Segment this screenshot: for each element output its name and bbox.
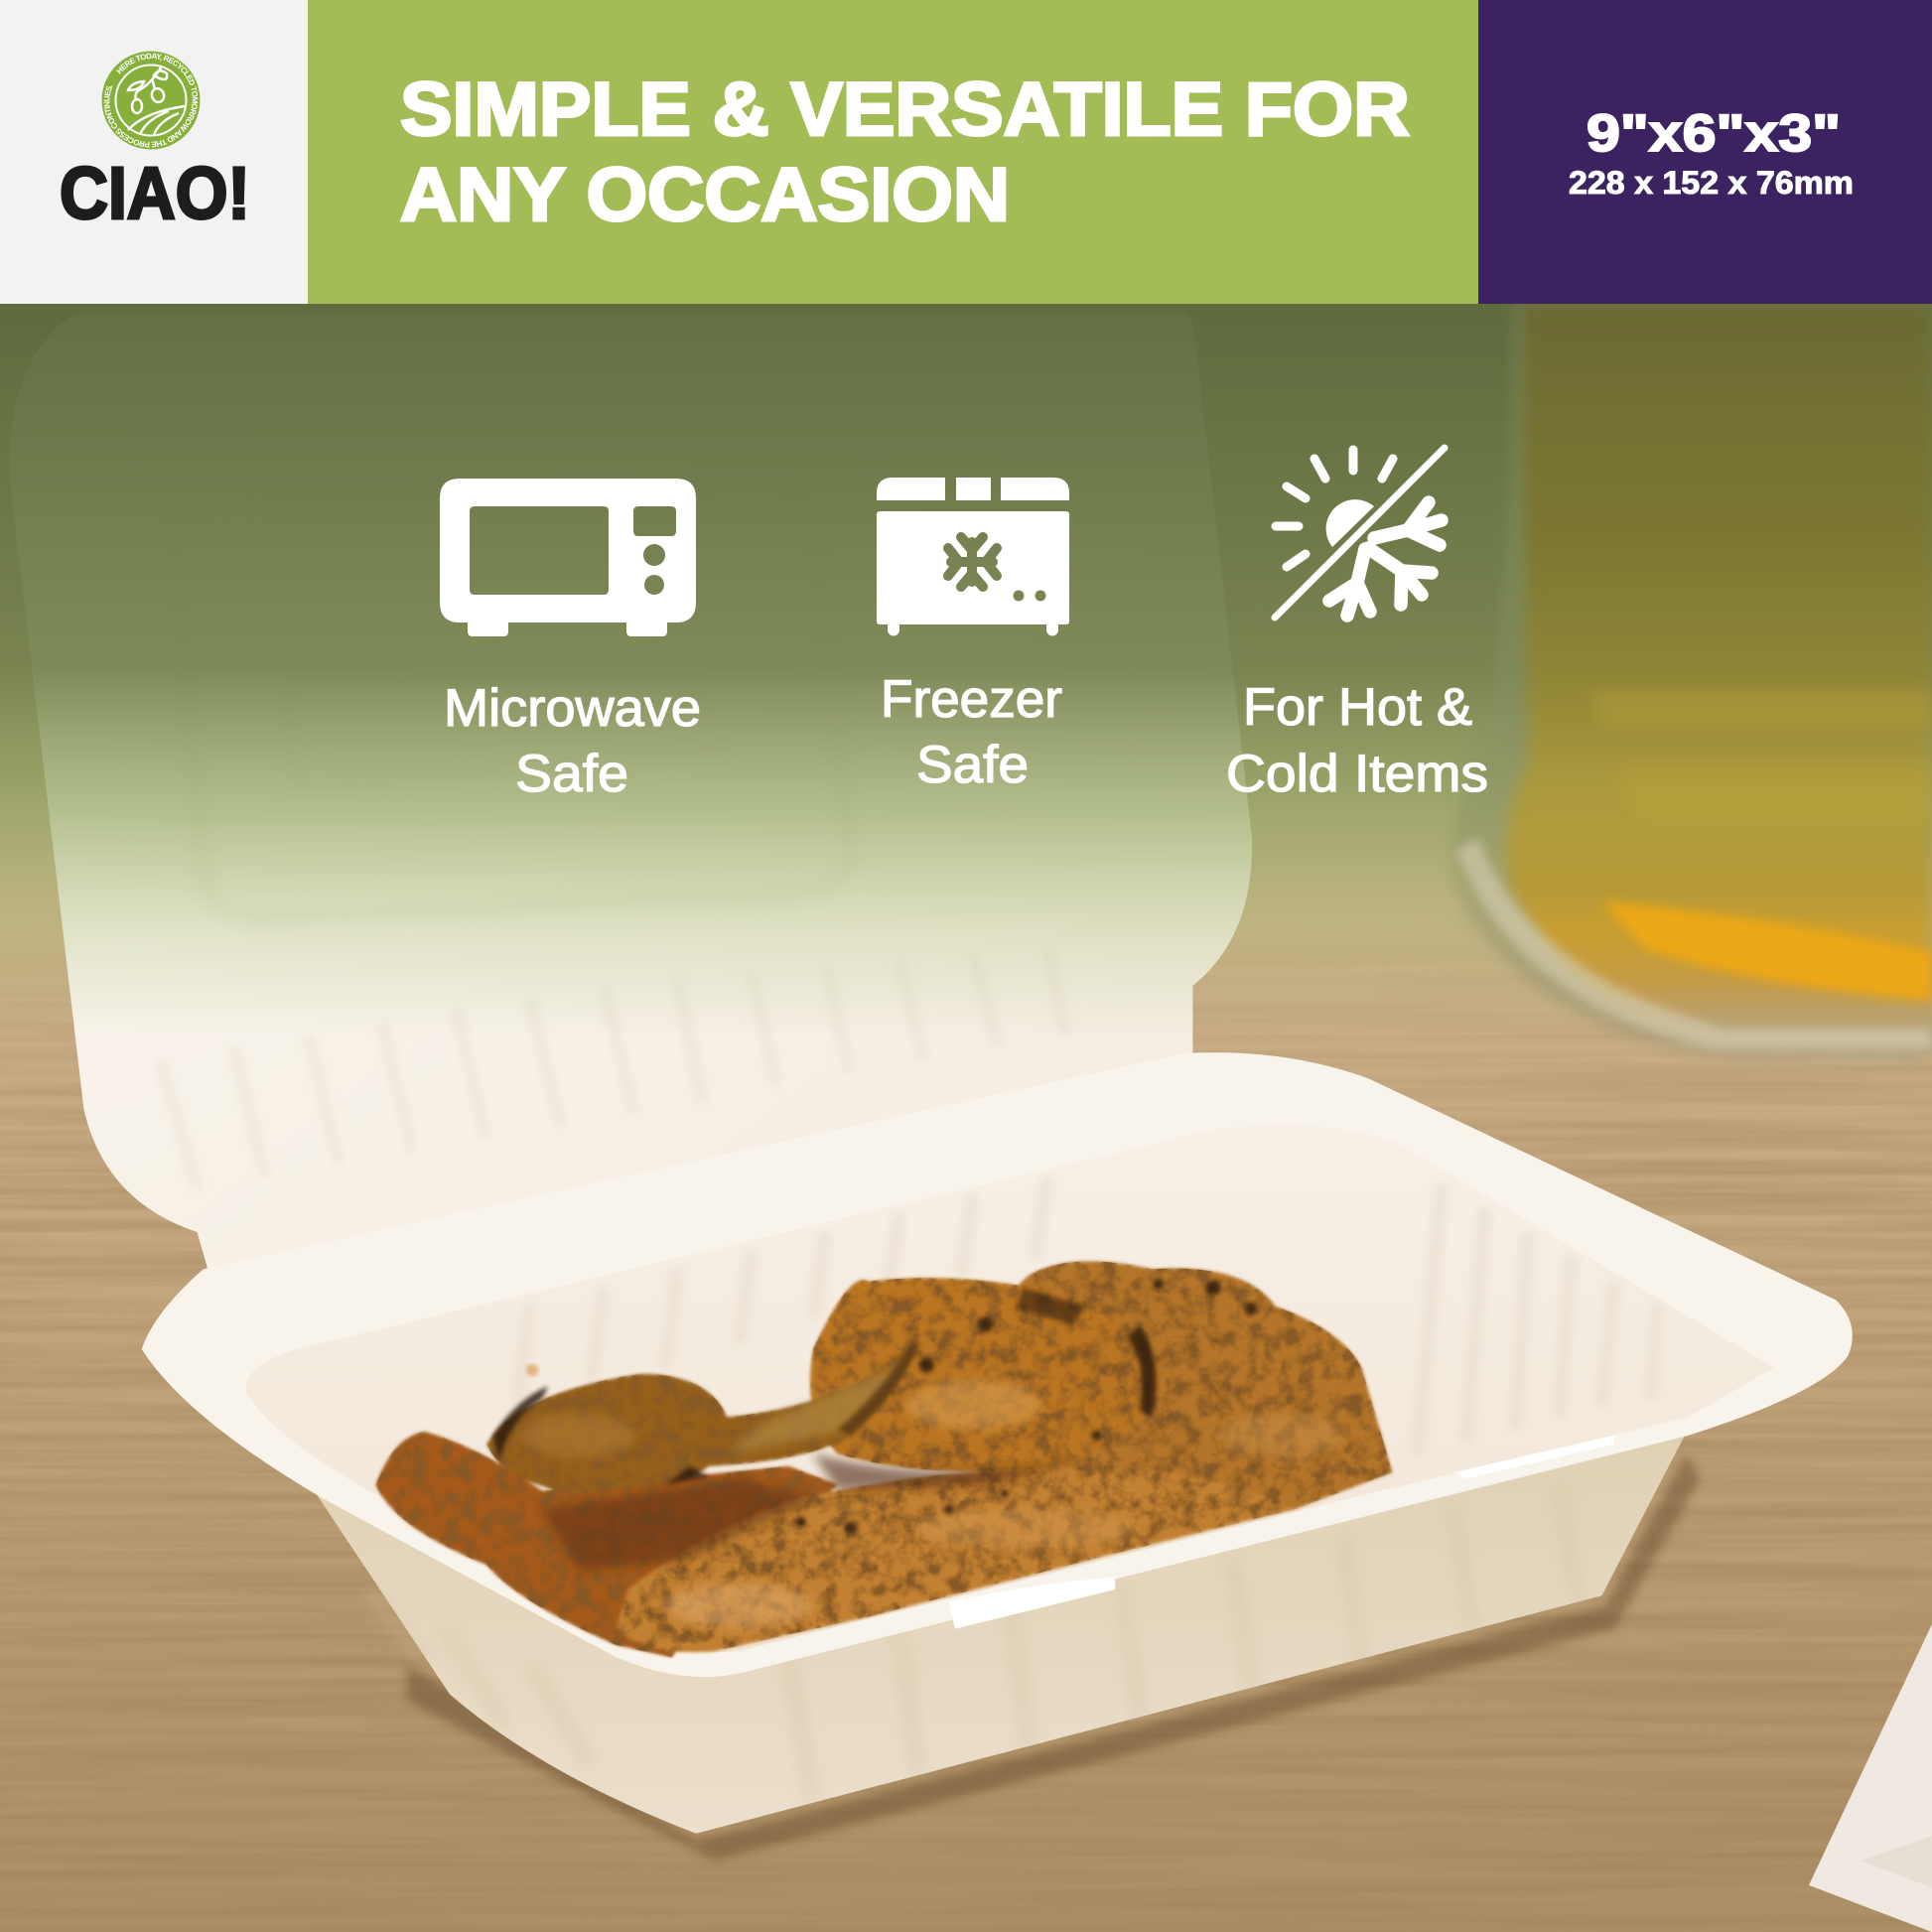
char marks on chicken xyxy=(492,1279,1257,1534)
icon: sun and snowflake xyxy=(1275,448,1445,618)
base of the box xyxy=(142,1052,1853,1834)
label: freezer safe xyxy=(881,670,1062,794)
metric size: 228 x 152 x 76mm xyxy=(1569,165,1854,201)
label: for hot and cold items: For Hot & xyxy=(1243,678,1472,737)
label: microwave safe xyxy=(444,679,701,803)
icon: microwave xyxy=(440,479,696,636)
feature: freezer safe xyxy=(877,478,1069,794)
white napkin xyxy=(1809,1624,1932,1932)
label: for hot and cold items: Cold Items xyxy=(1226,745,1488,803)
size panel xyxy=(1478,0,1932,304)
icon: freezer xyxy=(877,478,1069,635)
blurred beer mug xyxy=(1452,303,1932,1057)
logo panel xyxy=(0,0,308,304)
heading line two: ANY OCCASION xyxy=(400,153,1010,237)
table and blurred background xyxy=(0,841,1932,1932)
label: freezer safe: Freezer xyxy=(881,670,1062,729)
label: freezer safe: Safe xyxy=(916,736,1029,794)
heading line one: SIMPLE & VERSATILE FOR xyxy=(400,68,1410,152)
label: microwave safe: Safe xyxy=(515,745,628,803)
label: microwave safe: Microwave xyxy=(444,679,701,738)
grilled chicken pieces xyxy=(376,1261,1392,1657)
logo badge: HERE TODAY, RECYCLED TOMORROW AND THE PROCESS CONTINUES. xyxy=(103,54,199,147)
imperial size: 9"x6"x3" xyxy=(1587,104,1841,163)
heading banner xyxy=(308,0,1478,304)
lid of the box xyxy=(20,565,1252,1269)
brand name: CIAO! xyxy=(60,152,250,234)
label: for hot and cold items xyxy=(1226,678,1488,803)
feature: microwave safe xyxy=(440,479,701,803)
feature: hot and cold xyxy=(1226,448,1488,803)
highlights and shadows on chicken xyxy=(523,1361,1343,1627)
green gradient overlay xyxy=(0,303,1932,1042)
shadow under box xyxy=(407,1453,1701,1861)
